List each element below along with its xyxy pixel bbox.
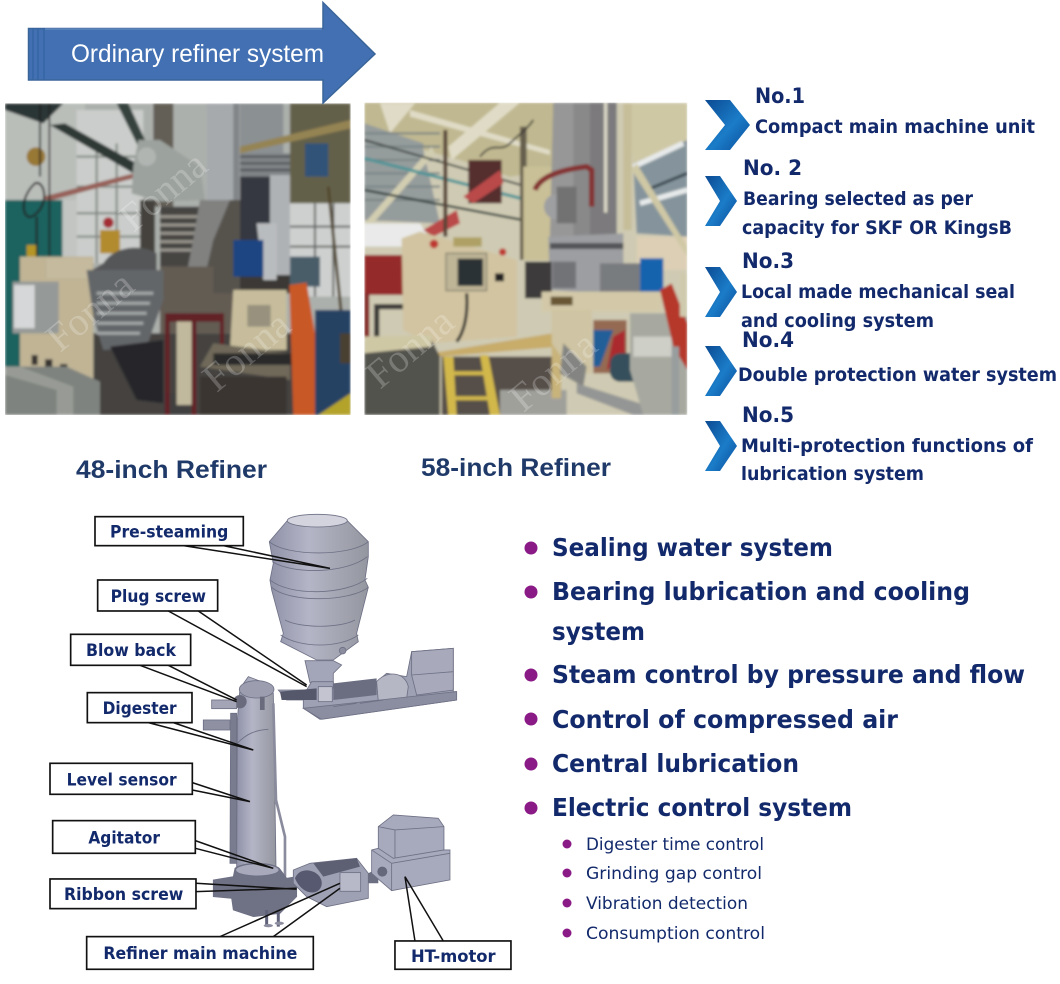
label: agitator: Agitator [88,828,161,847]
label: plug screw: Plug screw [111,587,206,606]
feature No.3 [705,249,1015,332]
photo: 48-inch refiner: Fonna [194,301,299,400]
pre-steaming hopper [269,514,368,683]
label: refiner main machine: Refiner main machine [103,944,297,963]
label: pre-steaming [95,517,243,546]
label: blow back: Blow back [86,641,177,660]
feature No.2: Bearing selected as per [743,188,974,210]
label: agitator [53,821,195,853]
photo: 48-inch refiner: Fonna [37,261,143,360]
label: ribbon screw [50,879,196,909]
feature No.5: lubrication system [741,463,924,485]
feature No.2: No. 2 [743,156,802,180]
feature No.5 [705,403,1034,485]
photo: 58-inch refiner: Fonna [357,298,463,397]
arrow: ordinary refiner system: Ordinary refiner system [71,40,324,68]
plug screw feeder [278,648,457,719]
bullet: steam control: Steam control by pressure and flow [552,660,1025,689]
refiner main machine [293,858,378,907]
HT motor [372,815,450,891]
label: pre-steaming: Pre-steaming [110,523,228,542]
feature No.2: capacity for SKF OR KingsB [742,217,1012,239]
feature No.2 [705,156,1012,239]
bullet: bearing lubrication and cooling system: Bearing lubrication and cooling [552,577,970,606]
feature No.3: and cooling system [741,310,934,332]
label: refiner main machine [87,937,313,969]
feature No.3: Local made mechanical seal [741,281,1015,303]
feature No.4 [705,328,1057,396]
digester base and ribbon screw [213,863,297,927]
photo: 48-inch refiner: Fonna [110,141,216,240]
leader lines [140,546,443,941]
photo: 58-inch refiner: Fonna [500,321,606,420]
bullet: bearing lubrication and cooling system: system [552,617,645,646]
feature No.1 [705,84,1035,150]
label: blow back [71,634,191,665]
photo: 58-inch refiner [357,103,687,420]
labelled machine diagram [50,514,511,969]
bullet: electric control system: Electric control system [552,793,852,822]
feature No.4: No.4 [742,328,794,352]
arrow: ordinary refiner system [28,2,375,103]
bullet: compressed air: Control of compressed air [552,705,899,734]
feature No.1: No.1 [755,84,805,108]
digester column [203,677,285,877]
label: HT-motor [395,941,511,969]
system bullet list [524,533,1025,944]
sub-bullet: vibration detection: Vibration detection [586,894,748,914]
bullet: central lubrication: Central lubrication [552,749,799,778]
feature list: No.1 to No.5 [705,84,1057,485]
label: digester: Digester [103,699,177,718]
feature No.3: No.3 [742,249,794,273]
bullet: sealing water system: Sealing water system [552,533,833,562]
label: ribbon screw: Ribbon screw [64,885,183,904]
label: level sensor [50,763,192,794]
label: digester [87,693,192,723]
bullet: bearing lubrication and cooling system [524,577,970,646]
photo: 48-inch refiner [5,103,351,415]
label: plug screw [98,580,218,611]
feature No.5: No.5 [742,403,794,427]
sub-bullet: digester time control: Digester time control [586,835,764,855]
feature No.5: Multi-protection functions of [741,435,1034,457]
sub-bullet: grinding gap control: Grinding gap control [586,864,762,884]
sub-bullet: consumption control: Consumption control [586,924,765,944]
feature No.1: Compact main machine unit [755,116,1035,138]
label: HT-motor: HT-motor [411,947,496,966]
label: level sensor: Level sensor [67,770,177,789]
heading: 48-inch refiner: 48-inch Refiner [76,456,267,484]
heading: 58-inch refiner: 58-inch Refiner [421,454,611,482]
